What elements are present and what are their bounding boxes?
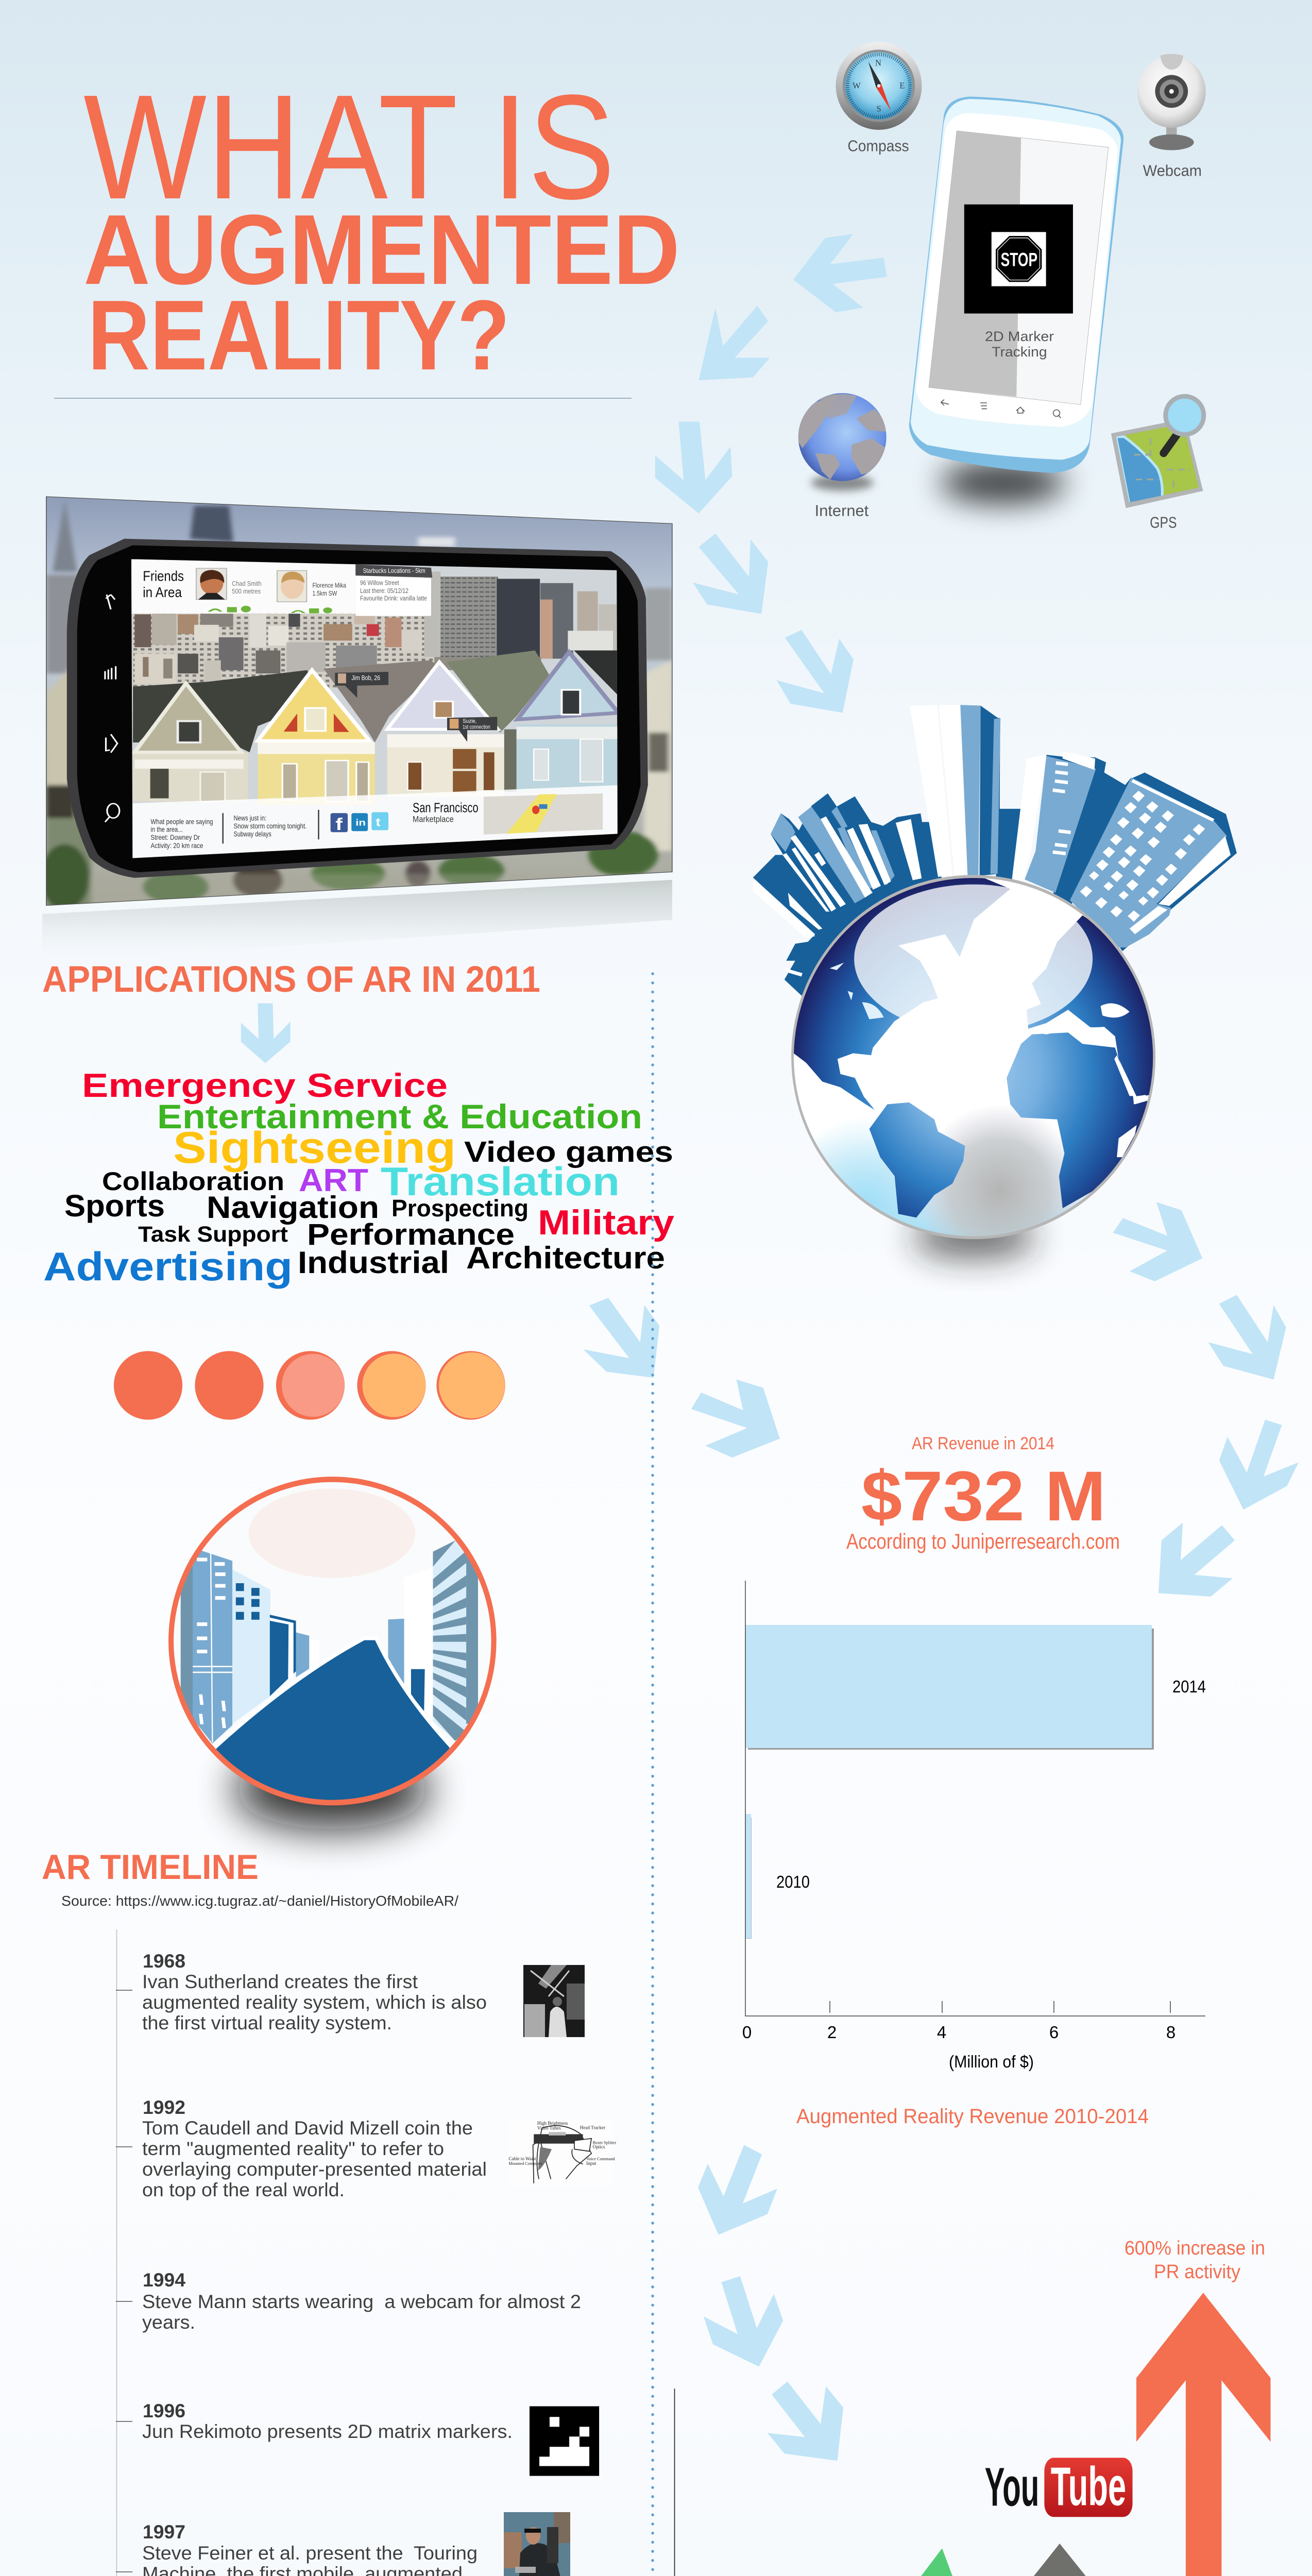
timeline 1994: 1994 bbox=[143, 2269, 185, 2291]
icon: internet globe bbox=[798, 393, 887, 519]
timeline 1992: on top of the real world. bbox=[142, 2179, 345, 2200]
arrows bbox=[698, 2145, 843, 2461]
diagram: head-mounted AR device: Cable to Waist bbox=[508, 2156, 536, 2161]
revenue callout: $732 M bbox=[861, 1457, 1106, 1536]
bottom info panel: t bbox=[376, 816, 381, 829]
photo: Sutherland head-mounted display bbox=[523, 1965, 585, 2037]
city band bbox=[131, 613, 448, 688]
icon: GPS map: GPS bbox=[1150, 514, 1177, 531]
icon: compass: E bbox=[899, 81, 905, 91]
word cloud: AR applications: Video games bbox=[464, 1136, 673, 1168]
title: AUGMENTED bbox=[83, 194, 680, 305]
callouts: 1st connection bbox=[463, 724, 490, 730]
bar chart: AR revenue: 0 bbox=[742, 2023, 752, 2042]
timeline 1996: Jun Rekimoto presents 2D matrix markers. bbox=[142, 2421, 513, 2442]
friends panel: Friends bbox=[143, 568, 184, 584]
bar chart: AR revenue: 2 bbox=[827, 2023, 837, 2042]
YouTube logo bbox=[985, 2456, 1133, 2517]
tablet screen: augmented street view bbox=[131, 559, 620, 860]
AR phone photograph bbox=[40, 497, 673, 962]
timeline 1968: Ivan Sutherland creates the first bbox=[142, 1971, 418, 1992]
word cloud: AR applications: Performance bbox=[307, 1218, 515, 1251]
word cloud: AR applications: Industrial bbox=[298, 1245, 449, 1280]
icon: GPS map bbox=[1111, 396, 1204, 531]
diagram: head-mounted AR device bbox=[507, 2119, 617, 2188]
word cloud: AR applications: Entertainment & Education bbox=[157, 1097, 642, 1136]
coral arrow bbox=[1136, 2293, 1271, 2576]
dotted column divider bbox=[651, 974, 654, 2576]
tablet body bbox=[67, 539, 648, 878]
globe with city bbox=[753, 705, 1237, 1257]
friends panel: Starbucks Locations - 5km bbox=[363, 567, 425, 575]
stop marker: STOP bbox=[1001, 249, 1037, 270]
bottom info panel: in bbox=[355, 818, 366, 828]
photo reflection bbox=[42, 880, 672, 962]
word cloud: AR applications: Navigation bbox=[207, 1190, 379, 1225]
rooftops bbox=[133, 670, 323, 752]
icon: city in circle bbox=[171, 1479, 494, 1837]
icon: compass: S bbox=[877, 104, 881, 113]
word cloud: AR applications: ART bbox=[299, 1163, 368, 1198]
circle shadow bbox=[233, 1750, 431, 1829]
bar chart: AR revenue bbox=[742, 1581, 1206, 2128]
diagram: head-mounted AR device: Voice Command bbox=[586, 2157, 615, 2161]
timeline 1996: 1996 bbox=[143, 2400, 185, 2421]
bottom info panel: Marketplace bbox=[413, 814, 454, 824]
bar chart: AR revenue: 2014 bbox=[1172, 1677, 1206, 1696]
bottom info panel bbox=[132, 785, 618, 858]
friends panel: Florence Mika bbox=[313, 582, 347, 589]
house 4 bbox=[517, 652, 619, 793]
chart annotations bbox=[702, 2238, 1265, 2576]
arrow bbox=[793, 234, 887, 312]
bottom info panel: f bbox=[335, 815, 343, 834]
timeline 1997: Steve Feiner et al. present the Touring bbox=[142, 2543, 478, 2564]
label: 2D marker tracking: 2D Marker bbox=[985, 329, 1054, 344]
icon: compass: Compass bbox=[847, 137, 909, 155]
house 1 bbox=[133, 683, 248, 802]
word cloud: AR applications bbox=[43, 1066, 674, 1289]
timeline 1997: 1997 bbox=[143, 2521, 185, 2543]
bottom info panel: Snow storm coming tonight. bbox=[233, 823, 306, 831]
icon: compass: W bbox=[853, 81, 861, 91]
icon: webcam: Webcam bbox=[1143, 162, 1202, 179]
bar chart: AR revenue: 6 bbox=[1049, 2023, 1059, 2042]
icon: webcam bbox=[1137, 54, 1206, 179]
globe shadow bbox=[913, 1216, 1035, 1257]
timeline 1992 bbox=[142, 2097, 487, 2200]
bottom info panel: San Francisco bbox=[413, 801, 479, 816]
timeline 1968: 1968 bbox=[143, 1951, 185, 1972]
phone cluster: 2D marker tracking bbox=[793, 42, 1206, 531]
friends panel: 500 metres bbox=[232, 588, 261, 596]
icon: internet globe: Internet bbox=[815, 502, 869, 519]
word cloud: AR applications: Task Support bbox=[138, 1222, 288, 1247]
callouts: Jim Bob, 26 bbox=[351, 674, 380, 682]
diagram: head-mounted AR device: Mounted Computer bbox=[508, 2161, 542, 2166]
label: 2D marker tracking: Tracking bbox=[992, 344, 1047, 360]
word cloud: AR applications: Military bbox=[538, 1203, 674, 1242]
timeline 1997 bbox=[142, 2521, 478, 2576]
word cloud: AR applications: Sightseeing bbox=[173, 1123, 456, 1173]
timeline 1968: augmented reality system, which is also bbox=[142, 1992, 487, 2013]
stop marker bbox=[964, 205, 1073, 314]
diagram: head-mounted AR device: Beam Splitter bbox=[593, 2141, 617, 2145]
house 2 bbox=[258, 670, 375, 805]
title: REALITY? bbox=[88, 279, 510, 391]
icon: compass: N bbox=[875, 58, 881, 68]
timeline 1992: Tom Caudell and David Mizell coin the bbox=[142, 2117, 473, 2139]
diagram: head-mounted AR device: Head Tracker bbox=[580, 2125, 605, 2130]
timeline 1992: 1992 bbox=[143, 2097, 185, 2118]
timeline 1968 bbox=[142, 1951, 487, 2033]
bottom info panel: Subway delays bbox=[233, 831, 271, 838]
bar chart: AR revenue: 8 bbox=[1166, 2023, 1175, 2042]
bottom info panel: News just in: bbox=[233, 815, 266, 822]
friends panel: 1.5km SW bbox=[313, 590, 337, 598]
bar chart: AR revenue: Augmented Reality Revenue 2010-2014 bbox=[796, 2105, 1149, 2128]
diagram: head-mounted AR device: Input bbox=[586, 2161, 597, 2166]
phone shadow bbox=[940, 462, 1065, 504]
arrows: path from phone to globe bbox=[655, 306, 854, 713]
chart annotations: 600% increase in bbox=[1124, 2238, 1265, 2259]
timeline 1996 bbox=[142, 2400, 513, 2442]
bottom info panel: in the area... bbox=[150, 826, 183, 834]
diagram: head-mounted AR device: Optics bbox=[593, 2144, 605, 2149]
timeline axis with ticks bbox=[116, 1929, 132, 2576]
timeline 1994 bbox=[142, 2269, 581, 2333]
diagram: head-mounted AR device: Video Tubes bbox=[537, 2125, 561, 2130]
friends panel: Favourite Drink: vanilla latte bbox=[360, 595, 427, 602]
bottom info panel: Street: Downey Dr bbox=[150, 834, 200, 841]
case study chart: Tissot at Selfridges bbox=[675, 2145, 1271, 2576]
bar chart: AR revenue: 2010 bbox=[776, 1872, 810, 1891]
chart annotations: PR activity bbox=[1154, 2261, 1240, 2283]
gray arrow bbox=[993, 2544, 1127, 2576]
friends panel: Last there: 05/12/12 bbox=[360, 587, 408, 595]
word cloud: AR applications: Sports bbox=[64, 1189, 165, 1223]
arrow bbox=[1158, 1522, 1235, 1597]
five progress dots bbox=[114, 1351, 505, 1420]
timeline 1992: term "augmented reality" to refer to bbox=[142, 2138, 444, 2159]
title bbox=[54, 64, 680, 399]
YouTube logo: You bbox=[985, 2456, 1039, 2517]
timeline 1968: the first virtual reality system. bbox=[142, 2012, 392, 2033]
friends panel: Chad Smith bbox=[232, 580, 262, 587]
photo: touring machine bbox=[504, 2512, 570, 2576]
word cloud: AR applications: Translation bbox=[381, 1159, 620, 1204]
arrow: applications down and onward bbox=[241, 1003, 1299, 1510]
timeline 1994: years. bbox=[142, 2312, 195, 2333]
word cloud: AR applications: Collaboration bbox=[102, 1167, 284, 1196]
bottom info panel: Activity: 20 km race bbox=[150, 842, 203, 850]
callouts bbox=[335, 672, 497, 742]
phone body bbox=[909, 97, 1123, 473]
globe bbox=[786, 874, 1166, 1239]
timeline 1992: overlaying computer-presented material bbox=[142, 2159, 487, 2180]
bottom info panel: What people are saying bbox=[150, 818, 213, 826]
friends panel bbox=[131, 559, 432, 616]
house 3 bbox=[387, 662, 517, 796]
timeline source: Source: https://www.icg.tugraz.at/~daniel/HistoryOfMobileAR/ bbox=[61, 1893, 458, 1909]
revenue callout: According to Juniperresearch.com bbox=[846, 1529, 1120, 1553]
icon: 2D matrix marker bbox=[530, 2406, 599, 2476]
heading: applications: APPLICATIONS OF AR IN 2011 bbox=[42, 959, 540, 1000]
title: WHAT IS bbox=[83, 64, 615, 230]
word cloud: AR applications: Prospecting bbox=[391, 1195, 529, 1222]
bar chart: AR revenue: (Million of $) bbox=[949, 2052, 1034, 2071]
blurred background photo bbox=[40, 497, 673, 910]
callouts: Suzie, bbox=[463, 717, 476, 724]
YouTube logo: Tube bbox=[1051, 2456, 1126, 2517]
revenue callout bbox=[846, 1434, 1120, 1553]
label: 2D marker tracking bbox=[985, 329, 1054, 360]
green growth arrow bbox=[676, 2548, 966, 2576]
word cloud: AR applications: Emergency Service bbox=[82, 1066, 448, 1104]
tall buildings bbox=[424, 571, 617, 670]
heading: AR timeline: AR TIMELINE bbox=[42, 1848, 259, 1887]
word cloud: AR applications: Architecture bbox=[466, 1241, 665, 1275]
icon: compass bbox=[836, 42, 922, 155]
bar chart: AR revenue: 4 bbox=[937, 2023, 946, 2042]
city skyline bbox=[753, 705, 1237, 995]
revenue callout: AR Revenue in 2014 bbox=[912, 1434, 1054, 1453]
friends panel: 96 Willow Street bbox=[360, 580, 399, 587]
word cloud: AR applications: Advertising bbox=[43, 1244, 293, 1289]
timeline 1994: Steve Mann starts wearing a webcam for almost 2 bbox=[142, 2291, 581, 2312]
diagram: head-mounted AR device: High Brightness bbox=[537, 2121, 568, 2126]
friends panel: in Area bbox=[143, 584, 182, 600]
